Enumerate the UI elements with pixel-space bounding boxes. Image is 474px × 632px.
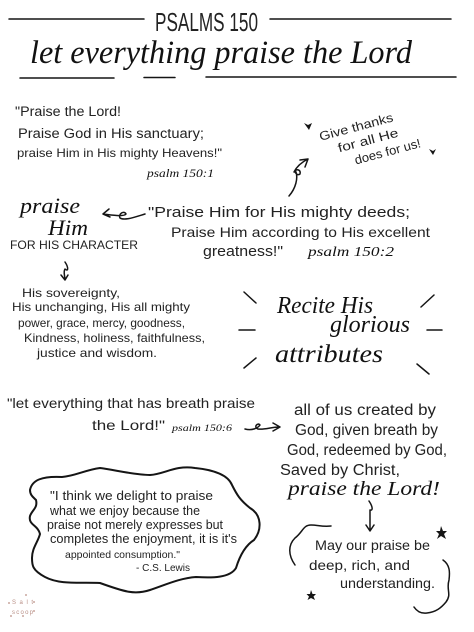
callout: may our praise: understanding. bbox=[340, 575, 435, 591]
text block: psalm 150:1 bbox=[15, 104, 222, 180]
arrow: left to praise him bbox=[103, 209, 145, 219]
callout: recite his glorious attributes: attributes bbox=[275, 341, 383, 368]
text block: attributes list bbox=[12, 286, 205, 360]
text block: all of us bbox=[280, 402, 447, 500]
callout: may our praise: deep, rich, and bbox=[309, 557, 410, 573]
text block: attributes list: Kindness, holiness, faithfulness, bbox=[24, 331, 205, 345]
text block: psalm 150:1: praise Him in His mighty Heavens!" bbox=[17, 146, 222, 160]
arrow: down to attributes bbox=[61, 262, 68, 280]
text block: psalm 150:1: psalm 150:1 bbox=[146, 166, 214, 180]
callout: give thanks: Give thanks bbox=[318, 111, 395, 144]
text block: attributes list: His unchanging, His all mighty bbox=[12, 300, 190, 314]
callout: recite his glorious attributes: Recite His bbox=[276, 293, 373, 319]
heading: praise him for his character: praise bbox=[18, 193, 80, 218]
arrow: up to give thanks bbox=[289, 159, 308, 196]
icon: star bottom bbox=[306, 590, 316, 600]
text block: psalm 150:2: psalm 150:2 bbox=[307, 245, 394, 260]
callout: give thanks bbox=[318, 105, 422, 175]
subtitle: let everything praise the Lord bbox=[30, 35, 412, 71]
callout: may our praise bbox=[290, 525, 449, 613]
callout: c.s. lewis cloud: appointed consumption." bbox=[65, 549, 180, 561]
heading: praise him for his character: Him bbox=[47, 215, 88, 240]
icon: star top bbox=[436, 526, 447, 539]
heading: praise him for his character: FOR HIS CHARACTER bbox=[10, 238, 138, 252]
text block: all of us: all of us created by bbox=[294, 402, 436, 419]
text block: attributes list: power, grace, mercy, goodness, bbox=[18, 316, 185, 330]
icon: heart right bbox=[429, 149, 436, 155]
text block: psalm 150:6: "let everything that has breath praise bbox=[7, 395, 255, 411]
callout: may our praise: May our praise be bbox=[315, 537, 430, 553]
text block: psalm 150:2 bbox=[148, 205, 430, 260]
callout: give thanks: does for us! bbox=[353, 136, 422, 167]
title: PSALMS 150 bbox=[155, 7, 258, 37]
arrow: down to prayer bbox=[366, 501, 374, 531]
text block: all of us: God, given breath by bbox=[295, 422, 438, 439]
callout: c.s. lewis cloud: - C.S. Lewis bbox=[136, 563, 190, 574]
header bbox=[9, 7, 456, 78]
logo: salt scoop bbox=[8, 594, 35, 617]
text block: psalm 150:6 bbox=[7, 395, 255, 434]
callout: recite his glorious attributes bbox=[239, 292, 442, 374]
callout: c.s. lewis cloud: completes the enjoyment, it is it's bbox=[50, 532, 237, 546]
heading: praise him for his character bbox=[10, 193, 138, 252]
callout: c.s. lewis cloud bbox=[30, 467, 260, 592]
callout: give thanks: for all He bbox=[336, 126, 400, 155]
arrow: right to all of us bbox=[245, 423, 280, 431]
icon: heart left bbox=[304, 123, 312, 130]
text block: attributes list: His sovereignty, bbox=[22, 286, 120, 300]
text block: psalm 150:1: "Praise the Lord! bbox=[15, 104, 121, 119]
callout: c.s. lewis cloud: praise not merely expresses but bbox=[47, 518, 224, 532]
text block: psalm 150:6: psalm 150:6 bbox=[171, 424, 232, 434]
text block: psalm 150:2: Praise Him according to His excellent bbox=[171, 224, 430, 240]
callout: recite his glorious attributes: glorious bbox=[330, 312, 410, 338]
callout: c.s. lewis cloud: what we enjoy because the bbox=[49, 504, 200, 518]
text block: all of us: Saved by Christ, bbox=[280, 462, 400, 479]
logo: salt scoop: Salt bbox=[12, 600, 33, 606]
text block: all of us: praise the Lord! bbox=[286, 478, 440, 500]
text block: psalm 150:1: Praise God in His sanctuary; bbox=[18, 126, 204, 141]
text block: all of us: God, redeemed by God, bbox=[287, 442, 447, 459]
callout: c.s. lewis cloud: "I think we delight to praise bbox=[50, 489, 213, 503]
logo: salt scoop: scoop bbox=[12, 610, 34, 616]
text block: psalm 150:2: greatness!" bbox=[203, 244, 283, 260]
text block: psalm 150:2: "Praise Him for His mighty deeds; bbox=[148, 205, 410, 221]
text block: psalm 150:6: the Lord!" bbox=[92, 417, 165, 433]
text block: attributes list: justice and wisdom. bbox=[36, 346, 157, 360]
